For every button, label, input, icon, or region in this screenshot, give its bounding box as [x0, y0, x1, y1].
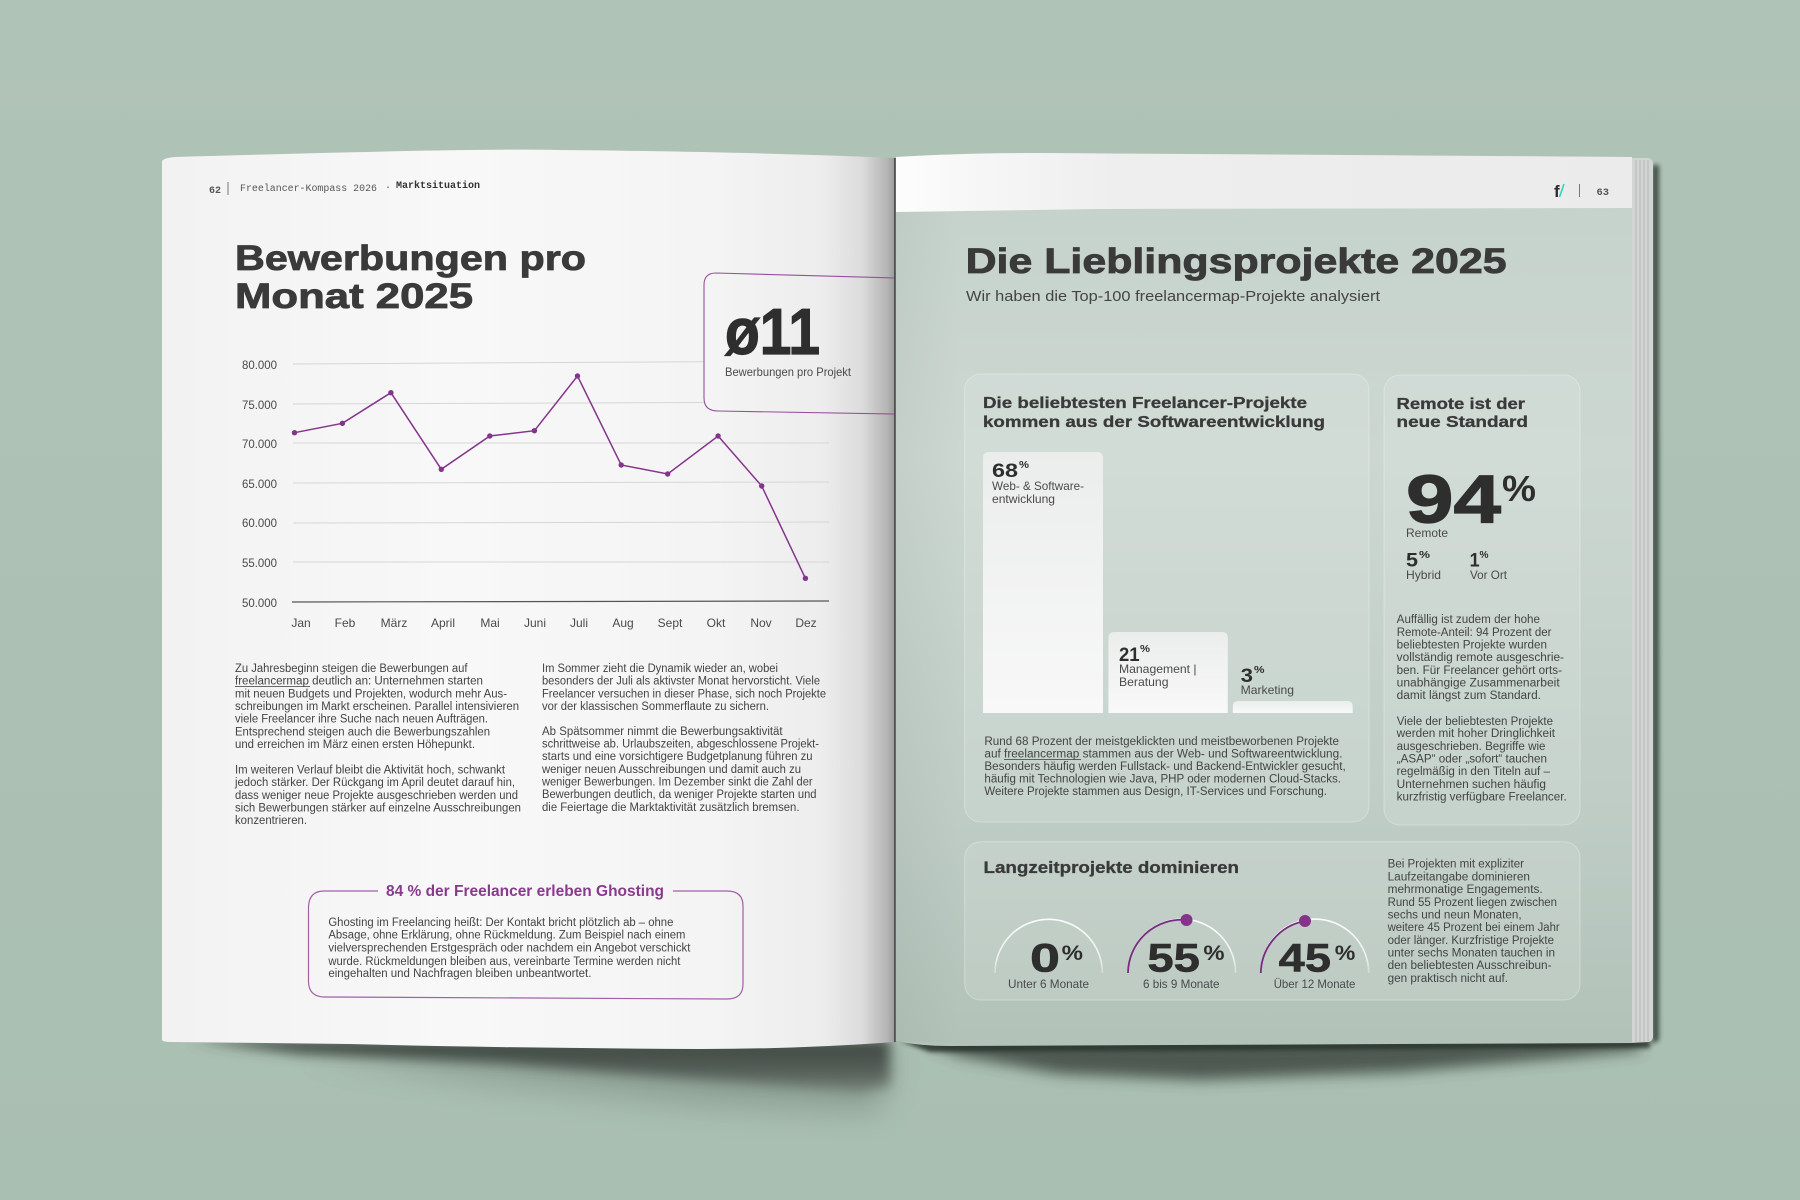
- bar: management: %: [1140, 644, 1150, 655]
- text column 2: besonders der Juli als aktivster Monat hervorsticht. Viele: [542, 676, 820, 688]
- paragraph: häufig mit Technologien wie Java, PHP oder modernen Cloud-Stacks.: [984, 774, 1341, 786]
- text column 2: starts und eine vorsichtigere Budgetplanung führen zu: [542, 751, 813, 763]
- bar: web and software: Web- & Software-: [992, 479, 1084, 493]
- gauge: 6 to 9 months: 6 bis 9 Monate: [1143, 977, 1220, 991]
- gauge: under 6 months: 0: [1030, 937, 1060, 981]
- callout: average applications: ø11: [725, 295, 820, 368]
- page header left: [209, 180, 480, 197]
- paragraph: „ASAP“ oder „sofort“ tauchen: [1397, 754, 1547, 766]
- callout: ghosting: eingehalten und Nachfragen bleiben unbeantwortet.: [328, 968, 591, 980]
- text column 2: vor der klassischen Sommerflaute zu sichern.: [542, 701, 769, 713]
- paragraph: Viele der beliebtesten Projekte: [1397, 716, 1553, 728]
- paragraph: Bei Projekten mit expliziter: [1388, 859, 1524, 871]
- stat: 5 percent: Hybrid: [1406, 568, 1441, 582]
- bar: web and software: entwicklung: [992, 492, 1055, 506]
- callout: ghosting: 84 % der Freelancer erleben Ghosting: [386, 883, 664, 900]
- stat: 5 percent: [1406, 550, 1441, 582]
- heading: Die beliebtesten Freelancer-Projekte: [983, 395, 1307, 412]
- text column 2: die Feiertage die Marktaktivität zusätzlich bremsen.: [542, 802, 800, 814]
- page header left: ·: [385, 183, 391, 194]
- title left: Monat 2025: [235, 277, 473, 316]
- text column 1: freelancermap deutlich an: Unternehmen starten: [235, 676, 483, 688]
- page header left: 62: [209, 186, 221, 197]
- line chart: applications per month: Sept: [658, 616, 683, 630]
- title left: [235, 239, 586, 316]
- line chart: applications per month: Jan: [291, 616, 311, 630]
- text column 1: jedoch stärker. Der Rückgang im April deutet darauf hin,: [234, 777, 515, 789]
- bar: marketing: [1233, 665, 1353, 713]
- title left: Bewerbungen pro: [235, 239, 586, 278]
- bar: management: Beratung: [1119, 675, 1168, 689]
- title right: Die Lieblingsprojekte 2025: [966, 242, 1507, 281]
- gauge: over 12 months: [1261, 915, 1369, 991]
- heading: Langzeitprojekte dominieren: [984, 859, 1239, 877]
- paragraph: Besonders häufig werden Fullstack- und Backend-Entwickler gesucht,: [984, 761, 1346, 773]
- stat: 5 percent: %: [1419, 550, 1430, 561]
- paragraph: Weitere Projekte stammen aus Design, IT-Services und Forschung.: [984, 786, 1327, 798]
- stat: 1 percent: [1470, 550, 1508, 582]
- line chart: applications per month: Aug: [612, 616, 634, 630]
- stat: 94 percent: %: [1502, 468, 1536, 509]
- bar: web and software: %: [1019, 460, 1029, 471]
- text column 2: schrittweise ab. Urlaubszeiten, abgeschlossene Projekt-: [542, 739, 819, 751]
- callout: ghosting: Absage, ohne Erklärung, ohne Rückmeldung. Zum Beispiel nach einem: [328, 930, 685, 942]
- text column 2: Ab Spätsommer nimmt die Bewerbungsaktivität: [542, 726, 783, 738]
- text column 1: [234, 663, 521, 827]
- paragraph: unter sechs Monaten tauchen in: [1388, 948, 1555, 960]
- paragraph: ausgeschrieben. Begriffe wie: [1397, 741, 1546, 753]
- bar: management: 21: [1119, 645, 1140, 666]
- text column 2: weniger neuen Ausschreibungen und damit auch zu: [541, 764, 801, 776]
- callout: ghosting: wurde. Rückmeldungen bleiben aus, vereinbarte Termine werden nicht: [327, 956, 681, 968]
- text column 2: Im Sommer zieht die Dynamik wieder an, wobei: [542, 663, 778, 675]
- paragraph: unabhängige Zusammenarbeit: [1397, 678, 1561, 690]
- text column 1: schreibungen im Markt erscheinen. Parallel intensivieren: [235, 701, 519, 713]
- paragraph: den beliebtesten Ausschreibun-: [1388, 960, 1552, 972]
- callout: ghosting: [308, 883, 743, 999]
- line chart: applications per month: 70.000: [242, 437, 277, 451]
- left page sheet: [162, 150, 895, 1049]
- line chart: applications per month: Mai: [480, 616, 500, 630]
- line chart: applications per month: 60.000: [242, 516, 277, 530]
- text column 1: Entsprechend steigen auch die Bewerbungszahlen: [235, 726, 490, 738]
- paragraph: auf freelancermap stammen aus der Web- und Softwareentwicklung.: [984, 749, 1342, 761]
- text column 2: Bewerbungen deutlich, da weniger Projekte starten und: [542, 789, 816, 801]
- paragraph: [984, 736, 1346, 798]
- paragraph: ben. Für Freelancer gehört orts-: [1397, 665, 1562, 677]
- text column 1: viele Freelancer ihre Suche nach neuen Aufträgen.: [235, 714, 488, 726]
- panel: remote: [1384, 375, 1580, 825]
- paragraph: mehrmonatige Engagements.: [1388, 884, 1543, 896]
- line chart: applications per month: März: [381, 616, 407, 630]
- heading: kommen aus der Softwareentwicklung: [983, 414, 1325, 431]
- paragraph: regelmäßig in den Titeln auf –: [1397, 766, 1551, 778]
- line chart: applications per month: 75.000: [242, 398, 277, 412]
- heading: neue Standard: [1396, 414, 1528, 431]
- gauge: 6 to 9 months: [1128, 914, 1236, 991]
- panel: long-term projects: [965, 842, 1580, 1000]
- bar: marketing: Marketing: [1241, 683, 1294, 697]
- line chart: applications per month: April: [431, 616, 455, 630]
- paragraph: weitere 45 Prozent bei einem Jahr: [1387, 922, 1560, 934]
- callout: ghosting: vielversprechenden Erstgespräch oder nachdem ein Angebot verschickt: [328, 943, 691, 955]
- bar: management: Management |: [1119, 662, 1197, 676]
- paragraph: Remote-Anteil: 94 Prozent der: [1397, 627, 1552, 639]
- text column 1: Im weiteren Verlauf bleibt die Aktivität hoch, schwankt: [235, 764, 506, 776]
- text column 2: Freelancer versuchen in dieser Phase, sich noch Projekte: [542, 688, 826, 700]
- paragraph: [1387, 859, 1560, 985]
- paragraph: Rund 55 Prozent liegen zwischen: [1388, 897, 1557, 909]
- page header right: [1554, 182, 1609, 201]
- title right: [966, 242, 1507, 305]
- bar: management: [1108, 632, 1228, 713]
- page header right: f: [1554, 182, 1560, 201]
- line chart: applications per month: Juni: [524, 616, 546, 630]
- text column 1: konzentrieren.: [235, 815, 307, 827]
- stat: 1 percent: 1: [1470, 551, 1480, 572]
- gauge: 6 to 9 months: %: [1203, 942, 1225, 965]
- gauge: under 6 months: %: [1062, 942, 1083, 965]
- stat: 94 percent: [1406, 462, 1536, 540]
- bar: web and software: [983, 452, 1103, 713]
- bar: marketing: 3: [1241, 666, 1253, 687]
- text column 1: dass weniger neue Projekte ausgeschrieben werden und: [235, 790, 518, 802]
- stat: 1 percent: Vor Ort: [1470, 568, 1508, 582]
- text column 2: weniger Bewerbungen. Im Dezember sinkt die Zahl der: [541, 777, 813, 789]
- callout: average applications: [704, 273, 895, 414]
- stat: 94 percent: Remote: [1406, 526, 1448, 540]
- text column 1: sich Bewerbungen stärker auf einzelne Ausschreibungen: [235, 803, 521, 815]
- line chart: applications per month: 55.000: [242, 556, 277, 570]
- line chart: applications per month: Nov: [750, 616, 772, 630]
- gauge: under 6 months: Unter 6 Monate: [1008, 977, 1089, 991]
- page header left: Marktsituation: [396, 180, 480, 192]
- stat: 94 percent: 94: [1406, 462, 1501, 538]
- callout: average applications: Bewerbungen pro Projekt: [725, 365, 852, 379]
- heading: Remote ist der: [1396, 396, 1525, 413]
- line chart: applications per month: 65.000: [242, 477, 277, 491]
- paragraph: vollständig remote ausgeschrie-: [1397, 652, 1564, 664]
- paragraph: oder länger. Kurzfristige Projekte: [1388, 935, 1554, 947]
- paragraph: damit längst zum Standard.: [1397, 690, 1541, 702]
- chart data line: [292, 373, 808, 581]
- white header strip: [896, 153, 1632, 212]
- gauge: over 12 months: %: [1335, 942, 1356, 965]
- paragraph: Unternehmen suchen häufig: [1397, 779, 1546, 791]
- panel: most popular projects: [965, 374, 1369, 822]
- text column 1: mit neuen Budgets und Projekten, wodurch mehr Aus-: [235, 688, 507, 700]
- right page sheet: [896, 153, 1632, 1046]
- stat: 1 percent: %: [1480, 550, 1489, 561]
- gauge: 6 to 9 months: 55: [1147, 937, 1200, 981]
- line chart: applications per month: Juli: [570, 616, 588, 630]
- stat: 5 percent: 5: [1406, 551, 1418, 572]
- panel: right page: [894, 153, 1653, 1046]
- heading: [1396, 396, 1528, 431]
- paragraph: werden mit hoher Dringlichkeit: [1396, 728, 1556, 740]
- bar: marketing: %: [1254, 665, 1265, 676]
- panel: left page: [162, 150, 895, 1049]
- paragraph: beliebtesten Projekte wurden: [1397, 640, 1547, 652]
- gauge: under 6 months: [995, 919, 1102, 991]
- paragraph: gen praktisch nicht auf.: [1388, 973, 1508, 985]
- title right: Wir haben die Top-100 freelancermap-Projekte analysiert: [966, 288, 1381, 305]
- page header left: Freelancer-Kompass 2026: [240, 183, 377, 195]
- text column 1: Zu Jahresbeginn steigen die Bewerbungen auf: [235, 663, 468, 675]
- page edge stack: [1630, 158, 1653, 1043]
- line chart: applications per month: Dez: [795, 616, 817, 630]
- gauge: over 12 months: Über 12 Monate: [1274, 977, 1356, 991]
- line chart: applications per month: Okt: [707, 616, 726, 630]
- text column 2: [541, 663, 826, 814]
- paragraph: [1396, 614, 1567, 804]
- heading: [983, 395, 1325, 431]
- bar: web and software: 68: [992, 461, 1018, 482]
- paragraph: Auffällig ist zudem der hohe: [1397, 614, 1540, 626]
- paragraph: Rund 68 Prozent der meistgeklickten und meistbeworbenen Projekte: [984, 736, 1339, 748]
- line chart: applications per month: [242, 358, 829, 630]
- line chart: applications per month: 50.000: [242, 596, 277, 610]
- paragraph: kurzfristig verfügbare Freelancer.: [1397, 792, 1567, 804]
- paragraph: sechs und neun Monaten,: [1388, 910, 1522, 922]
- paragraph: Laufzeitangabe dominieren: [1388, 872, 1530, 884]
- line chart: applications per month: 80.000: [242, 358, 277, 372]
- gauge: over 12 months: 45: [1279, 937, 1331, 981]
- spine line: [894, 158, 896, 1042]
- text column 1: und erreichen im März einen ersten Höhepunkt.: [235, 739, 475, 751]
- page header right: 63: [1596, 188, 1609, 199]
- line chart: applications per month: Feb: [335, 616, 356, 630]
- spine shading: [896, 212, 960, 1042]
- book shadow: [192, 165, 1659, 1112]
- callout: ghosting: Ghosting im Freelancing heißt: Der Kontakt bricht plötzlich ab – ohne: [328, 917, 673, 929]
